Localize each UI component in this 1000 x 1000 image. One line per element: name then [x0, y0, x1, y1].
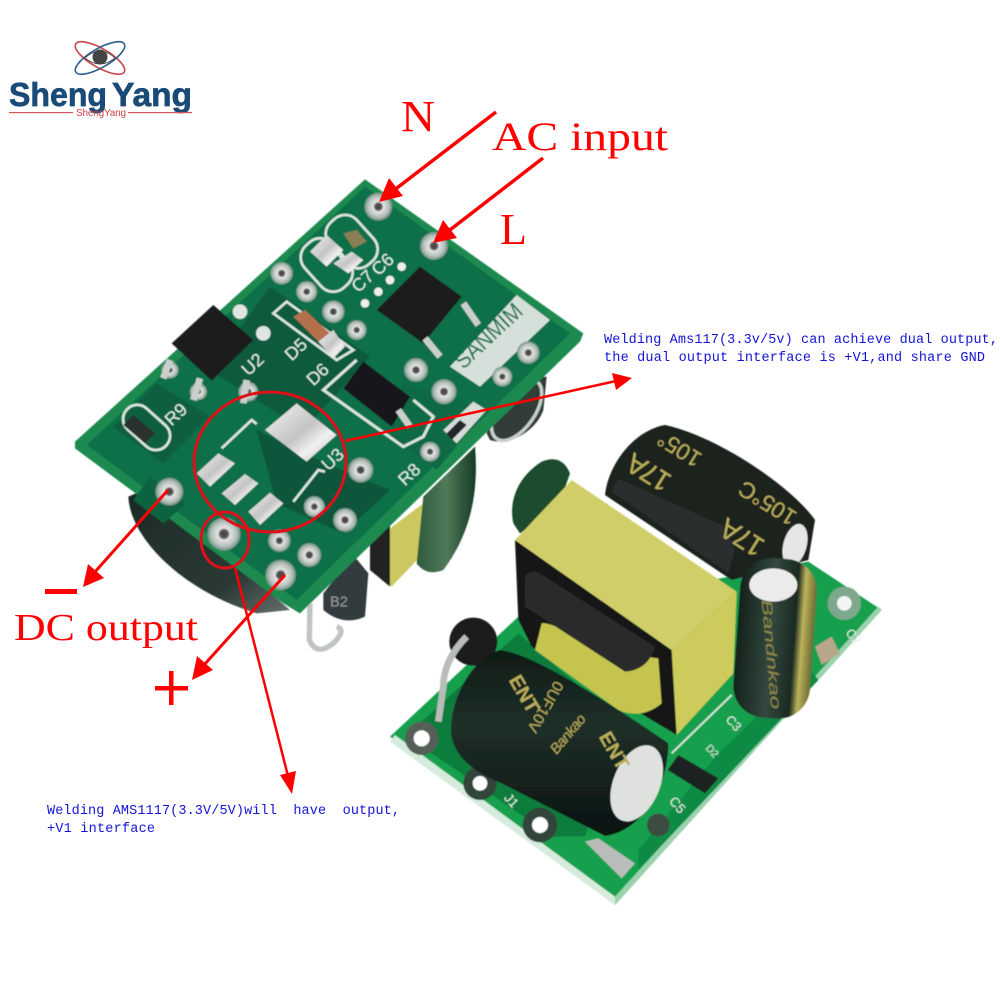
chip leads [163, 303, 478, 427]
note: dual output: the dual output interface is +V1,and share GND [604, 351, 985, 366]
logo subtitle: ShengYang [76, 108, 126, 119]
callout circle: U3 footprint [194, 392, 346, 532]
large 17A capacitor: 17A [713, 511, 770, 563]
label: plus sign [155, 671, 188, 705]
rear cylinder [487, 377, 547, 441]
green inductor [417, 447, 476, 572]
silk label U3: U3 [317, 444, 348, 475]
small right capacitor [731, 556, 819, 721]
small right capacitor: Bandnkao [758, 599, 783, 710]
small green capacitor behind transformer [512, 459, 570, 533]
logo rule right [128, 112, 192, 113]
large 17A capacitor: 105°C [734, 476, 801, 531]
left capacitor under board [128, 490, 290, 613]
through-hole pads [155, 193, 540, 590]
logo wordmark: Sheng [9, 76, 107, 113]
arrow: to minus [83, 490, 168, 587]
silk labels: C2 [843, 626, 864, 647]
note: dual output: Welding Ams117(3.3v/5v) can achieve dual output, [604, 333, 998, 348]
board pads [405, 722, 438, 755]
silver fuse pad [585, 838, 635, 878]
diode D5 [273, 302, 353, 360]
silk label D6: D6 [302, 359, 333, 390]
bottom capacitor: Bankao [547, 712, 590, 758]
callout circle: V1 pad [201, 512, 249, 568]
black winding and yellow bobbin [515, 540, 677, 735]
label: N: N [401, 92, 435, 141]
PCB component side: D2 [703, 742, 721, 761]
label: minus sign [45, 589, 77, 594]
PCB solder side [75, 179, 583, 613]
SANMIM silk block: SANMIM [449, 298, 528, 374]
large 17A capacitor [605, 425, 815, 580]
resistor R9 [117, 399, 176, 456]
logo: ShengYang [9, 36, 192, 119]
chip top right [377, 267, 462, 343]
diode with lead: B2 [330, 595, 348, 611]
yellow transformer top [515, 480, 737, 650]
silk outline cap [319, 208, 384, 275]
U3 footprint pads [197, 403, 337, 525]
D6 silk outline [323, 360, 433, 447]
bottom capacitor: 0UF10V [523, 678, 566, 736]
yellow transformer edge [370, 503, 423, 587]
capacitor pads [310, 235, 343, 267]
arrow: to V1 note [235, 568, 296, 794]
chip middle [343, 362, 410, 427]
logo wordmark: Yang [112, 76, 192, 113]
note: V1 output: +V1 interface [47, 822, 155, 837]
yellow transformer front [672, 592, 737, 735]
PCB component side [390, 562, 882, 905]
PCB component side: C3 [723, 713, 744, 734]
label: AC input: AC input [492, 114, 668, 159]
silk label C6: C6 [367, 249, 398, 280]
photo: left module, solder side up [75, 179, 583, 649]
photo: right module, component side up [390, 425, 882, 905]
label: L: L [500, 205, 527, 254]
SMD capacitor C2 [815, 637, 840, 665]
note: V1 output [47, 804, 400, 837]
large 17A capacitor: 105° [652, 426, 706, 473]
bottom capacitor [451, 650, 673, 836]
silk label R8: R8 [394, 459, 425, 490]
PCB component side: J1 [501, 790, 522, 811]
chip U2 [172, 305, 253, 381]
arrow: U3 to note [345, 373, 632, 441]
SMD chip D2 [668, 755, 718, 793]
diode with lead [309, 555, 368, 649]
icon: eye with orbits [71, 36, 129, 80]
arrow: to N pin [379, 112, 496, 202]
bottom capacitor: ENT [594, 728, 633, 774]
arrow: to plus [192, 575, 285, 680]
resistor R8 [443, 402, 487, 443]
PCB component side: C5 [666, 794, 689, 816]
bead and lead [438, 618, 497, 722]
capacitor text: 17A 105 C: 17A [620, 446, 677, 498]
note: V1 output: Welding AMS1117(3.3V/5V)will have output, [47, 804, 400, 819]
silk label C7: C7 [347, 266, 378, 296]
arrow: to L pin [433, 158, 543, 243]
logo wordmark [9, 76, 192, 113]
silk label R9: R9 [161, 399, 191, 430]
label: DC output: DC output [14, 607, 199, 649]
logo rule left [9, 112, 73, 113]
capacitor text: ENT [504, 671, 543, 717]
silk label U2: U2 [237, 349, 268, 380]
note: dual output [604, 333, 998, 366]
silk label D5: D5 [281, 334, 311, 365]
darker copper zones [210, 287, 370, 430]
